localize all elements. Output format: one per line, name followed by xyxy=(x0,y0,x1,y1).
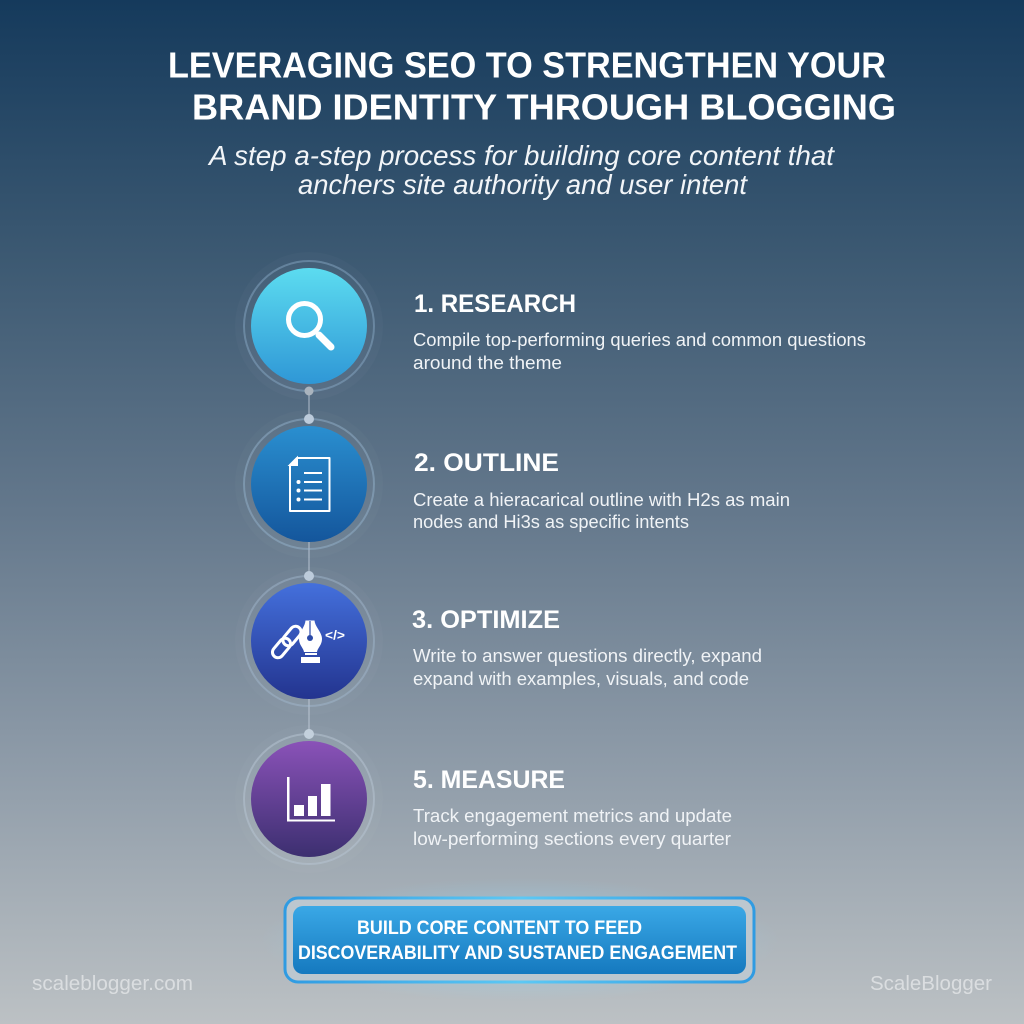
step 2 text: 2. OUTLINE xyxy=(414,449,559,477)
subtitle xyxy=(207,140,835,200)
step 4 text: Track engagement metrics and update xyxy=(413,806,732,826)
footer left: website: scaleblogger.com xyxy=(32,973,193,995)
step 2 text xyxy=(413,449,790,532)
step 2 text: nodes and Hi3s as specific intents xyxy=(413,512,689,532)
callout xyxy=(260,878,780,1002)
step 1 text: 1. RESEARCH xyxy=(414,290,576,318)
step 4 text: 5. MEASURE xyxy=(413,766,565,794)
step 1 node: research xyxy=(235,252,383,400)
icon: bar chart xyxy=(287,777,335,822)
connector dot xyxy=(304,414,314,424)
step 3 text: 3. OPTIMIZE xyxy=(412,606,560,634)
title: LEVERAGING SEO TO STRENGTHEN YOUR xyxy=(168,44,886,86)
callout: DISCOVERABILITY AND SUSTANED ENGAGEMENT xyxy=(298,943,737,964)
title xyxy=(168,44,896,128)
icon: magnifying glass xyxy=(288,304,331,347)
step 3 text: Write to answer questions directly, expand xyxy=(413,646,762,666)
step 3 text xyxy=(412,606,762,689)
connector dot xyxy=(304,571,314,581)
connector dot xyxy=(304,386,314,396)
step 3 node: optimize xyxy=(235,567,383,715)
step 2 text: Create a hieracarical outline with H2s as main xyxy=(413,490,790,510)
connector dot xyxy=(304,729,314,739)
subtitle: A step a-step process for building core content that xyxy=(207,140,835,171)
callout: BUILD CORE CONTENT TO FEED xyxy=(357,918,642,939)
step 1 text: around the theme xyxy=(413,353,562,373)
step 1 text xyxy=(413,290,866,373)
step 4 text xyxy=(413,766,732,849)
step 1 text: Compile top-performing queries and common questions xyxy=(413,330,866,350)
step 4 node: measure xyxy=(235,725,383,873)
step 3 text: expand with examples, visuals, and code xyxy=(413,669,749,689)
title: BRAND IDENTITY THROUGH BLOGGING xyxy=(192,86,896,128)
subtitle: anchers site authority and user intent xyxy=(298,169,748,200)
timeline connectors xyxy=(308,391,310,734)
icon: link, pen nib and code: </> xyxy=(325,628,345,642)
step 2 node: outline xyxy=(235,410,383,558)
icon: document xyxy=(290,458,330,511)
icon: link, pen nib and code xyxy=(270,620,345,663)
step 4 text: low-performing sections every quarter xyxy=(413,829,731,849)
footer right: brand: ScaleBlogger xyxy=(870,973,992,995)
